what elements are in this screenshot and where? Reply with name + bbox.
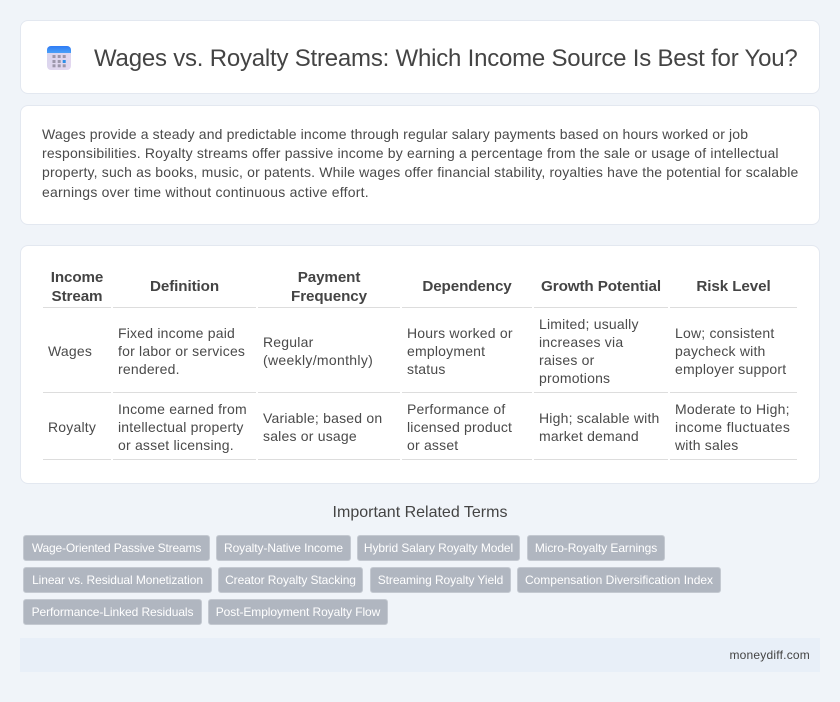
row: wages: Regular [263, 334, 313, 350]
table header: Frequency [291, 288, 367, 305]
row: wages: (weekly/monthly) [263, 352, 373, 368]
row: wages [48, 316, 786, 386]
row: wages: for labor or services [118, 343, 245, 359]
related terms tags: Linear vs. Residual Monetization [32, 573, 203, 587]
row: royalty: Royalty [48, 419, 96, 435]
title: Wages vs. Royalty Streams: Which Income Source Is Best for You? [94, 45, 798, 72]
row: wages: employer support [675, 361, 786, 377]
table header: Income [51, 269, 103, 286]
row: royalty: High; scalable with [539, 410, 660, 426]
row: wages: employment [407, 343, 485, 359]
row: wages: rendered. [118, 361, 180, 377]
row: wages: raises or [539, 352, 594, 368]
row: royalty: with sales [675, 437, 738, 453]
row: royalty: Performance of [407, 401, 506, 417]
related terms heading: Important Related Terms [333, 504, 507, 521]
row: wages: promotions [539, 370, 610, 386]
table header [51, 269, 771, 305]
related terms tags: Streaming Royalty Yield [378, 573, 503, 587]
intro panel [20, 105, 820, 225]
row: royalty [48, 401, 790, 453]
row: royalty: licensed product [407, 419, 512, 435]
row: wages: paycheck with [675, 343, 766, 359]
intro text: earnings over time without continuous active effort. [42, 184, 369, 200]
related terms tags: Performance-Linked Residuals [32, 605, 193, 619]
intro text: property, such as books, music, or patents. While wages offer financial stability, royalties have the potential for scalable [42, 164, 798, 180]
row: royalty: sales or usage [263, 428, 357, 444]
row: royalty: intellectual property [118, 419, 244, 435]
row: royalty: Variable; based on [263, 410, 382, 426]
row: royalty: Income earned from [118, 401, 247, 417]
intro text: Wages provide a steady and predictable income through regular salary payments based on hours worked or job [42, 126, 748, 142]
related terms tags: Compensation Diversification Index [525, 573, 713, 587]
related terms tags: Creator Royalty Stacking [225, 573, 356, 587]
intro text: responsibilities. Royalty streams offer passive income by earning a percentage from the sale or usage of intellectual [42, 145, 779, 161]
table header: Growth Potential [541, 278, 661, 295]
row: wages: Low; consistent [675, 325, 774, 341]
table header: Payment [298, 269, 360, 286]
table header: Dependency [422, 278, 512, 295]
row: royalty: or asset [407, 437, 458, 453]
related terms tags: Hybrid Salary Royalty Model [364, 541, 513, 555]
row: wages: Limited; usually [539, 316, 639, 332]
row: royalty: income fluctuates [675, 419, 790, 435]
related terms tags: Royalty-Native Income [224, 541, 343, 555]
row: royalty: or asset licensing. [118, 437, 234, 453]
icon: calendar [47, 46, 71, 70]
row: wages: increases via [539, 334, 623, 350]
row: wages: Hours worked or [407, 325, 513, 341]
row: royalty: market demand [539, 428, 639, 444]
comparison table [43, 269, 797, 460]
footer source: moneydiff.com [729, 648, 810, 662]
intro text [42, 126, 798, 200]
related terms tags: Wage-Oriented Passive Streams [32, 541, 201, 555]
table header: Stream [52, 288, 102, 305]
related terms tags: Post-Employment Royalty Flow [216, 605, 380, 619]
table header: Risk Level [696, 278, 771, 295]
row: wages: Fixed income paid [118, 325, 235, 341]
row: wages: status [407, 361, 446, 377]
comparison table panel [20, 245, 820, 484]
related terms tags: Micro-Royalty Earnings [535, 541, 657, 555]
row: royalty: Moderate to High; [675, 401, 790, 417]
related terms tags [23, 535, 721, 625]
table header: Definition [150, 278, 219, 295]
row: wages: Wages [48, 343, 92, 359]
footer bar [20, 638, 820, 672]
header card [20, 20, 820, 94]
